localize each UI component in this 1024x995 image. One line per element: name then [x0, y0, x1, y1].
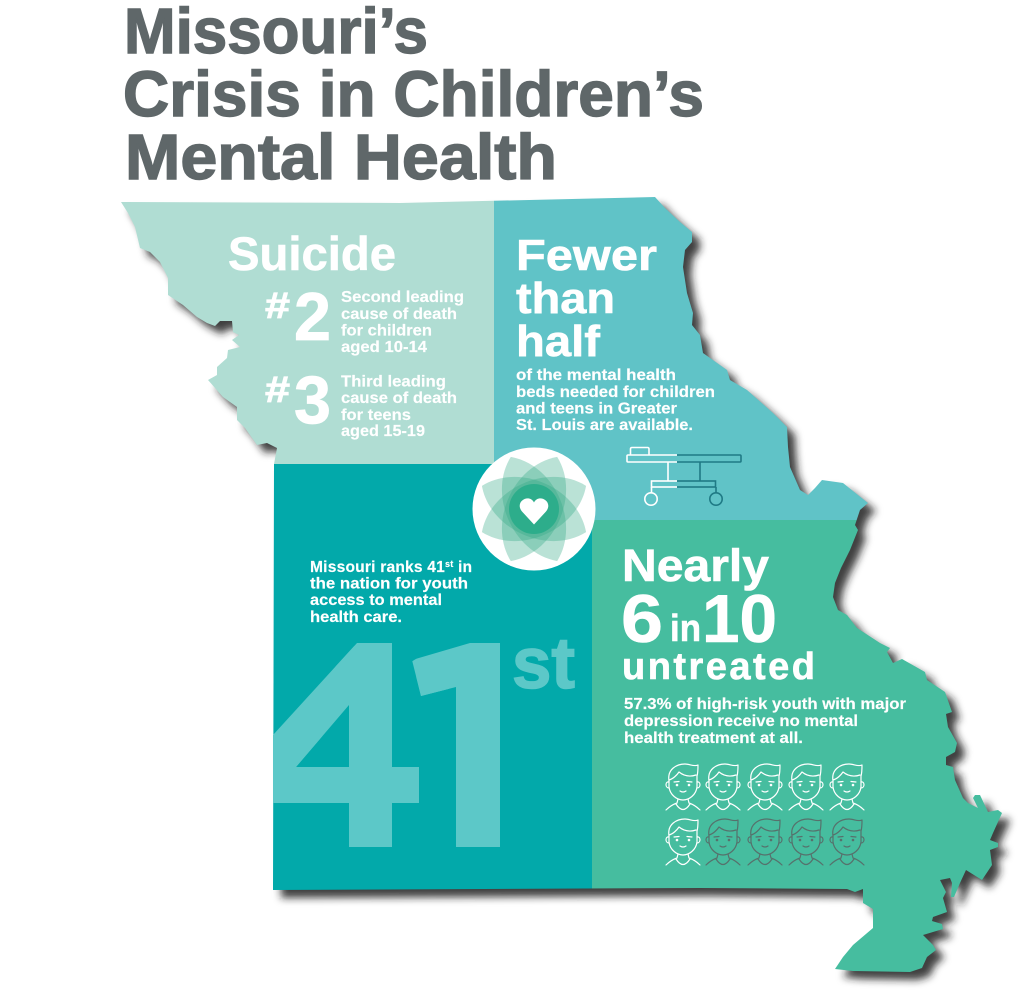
heading: fewer than half: half [516, 317, 600, 366]
heading: nearly 6 in 10 untreated: Nearly [622, 540, 769, 591]
text: Missouri ranks 41st: access to mental [310, 592, 442, 609]
text: Missouri ranks 41st: Missouri ranks 41 [310, 559, 445, 576]
text: mental health beds: of the mental health [516, 367, 676, 384]
text: Missouri ranks 41st: in [453, 559, 472, 576]
heading: nearly 6 in 10 untreated: 6 [621, 581, 663, 657]
text: second leading cause: cause of death [341, 306, 457, 323]
panel: nearly 6 in 10 [621, 540, 906, 865]
heading: nearly 6 in 10 untreated [621, 540, 815, 688]
text: 57.3% untreated youth: depression receive no mental [624, 713, 858, 730]
heading: nearly 6 in 10 untreated: 10 [702, 581, 777, 657]
text: mental health beds: St. Louis are available. [516, 417, 693, 434]
title [123, 0, 704, 193]
title: Mental Health [125, 121, 557, 193]
stat: number 2 [265, 279, 331, 355]
text: Missouri ranks 41st: the nation for youth [310, 576, 468, 592]
stat: number 3 [265, 362, 331, 438]
text: second leading cause: aged 10-14 [341, 339, 427, 356]
stat: number 3: # [265, 369, 290, 410]
center logo: flower and heart [471, 446, 597, 572]
big number 41st: st [512, 624, 575, 704]
heading: nearly 6 in 10 untreated: untreated [622, 646, 815, 688]
icon group: ten children faces [666, 764, 864, 865]
text: Missouri ranks 41st: st [445, 559, 453, 569]
title: Crisis in Children’s [123, 58, 704, 130]
text: mental health beds [516, 367, 715, 434]
text: third leading cause: cause of death [341, 390, 457, 407]
panel: fewer than half [516, 231, 741, 505]
text: mental health beds: and teens in Greater [516, 400, 677, 418]
text: Missouri ranks 41st [310, 559, 472, 626]
stat: number 3: 3 [294, 362, 331, 438]
heading: fewer than half [516, 231, 657, 366]
heading: fewer than half: than [516, 274, 615, 323]
map shadow [129, 205, 1010, 980]
text: third leading cause [341, 374, 457, 440]
big number 41st [273, 640, 575, 847]
text: third leading cause: for teens [341, 407, 411, 424]
icon: hospital bed [627, 448, 741, 505]
heading: fewer than half: Fewer [516, 231, 657, 280]
text: third leading cause: aged 15-19 [341, 423, 425, 440]
text: 57.3% untreated youth: health treatment at all. [624, 730, 803, 747]
stat: number 2: 2 [294, 279, 331, 355]
text: second leading cause: for children [341, 322, 432, 340]
text: mental health beds: beds needed for children [516, 384, 715, 401]
panel: 41st [273, 560, 575, 847]
text: second leading cause: Second leading [341, 289, 464, 306]
stat: number 2: # [265, 285, 290, 326]
text: 57.3% untreated youth [624, 696, 906, 747]
big number 41st: 4 [255, 583, 429, 909]
text: Missouri ranks 41st: health care. [310, 609, 402, 626]
text: third leading cause: Third leading [341, 374, 446, 390]
heading: suicide: Suicide [228, 227, 396, 280]
map of Missouri with four colored panels [100, 190, 1024, 995]
heading: nearly 6 in 10 untreated: in [670, 608, 701, 650]
text: second leading cause [341, 289, 464, 356]
big number 41st: 1 [392, 583, 562, 909]
panel: suicide [228, 227, 464, 440]
text: 57.3% untreated youth: 57.3% of high-risk youth with major [624, 696, 906, 713]
